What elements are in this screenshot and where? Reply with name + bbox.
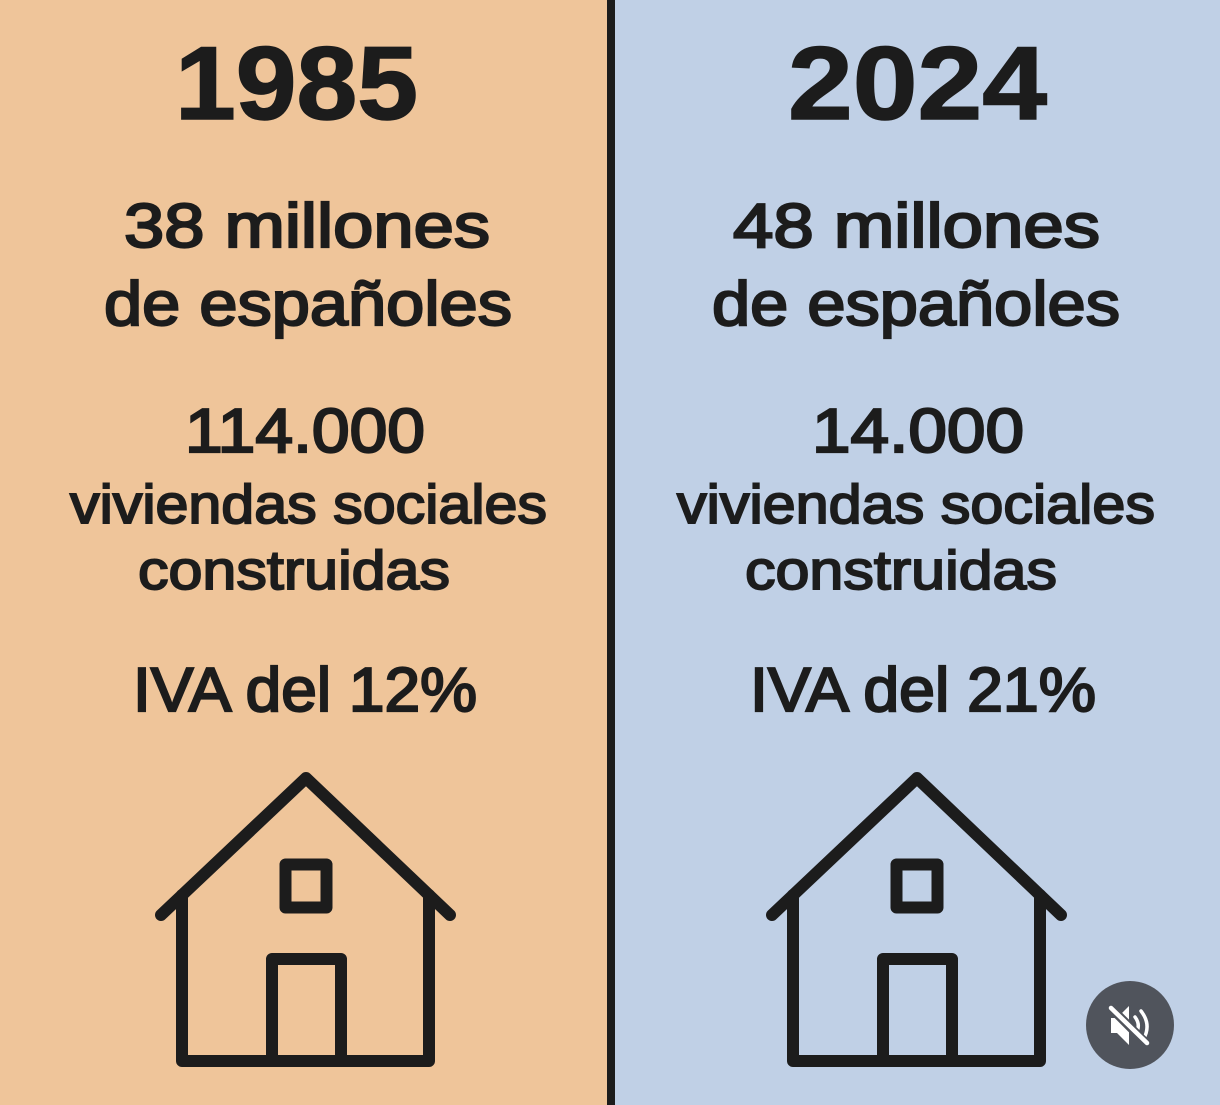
social housing 1985: viviendas sociales [70,473,547,535]
population 2024: 48 millones [733,192,1100,261]
social housing 2024: construidas [745,539,1057,601]
population 1985: de españoles [104,270,512,339]
social housing 1985: 114.000 [185,397,425,466]
VAT 2024: IVA del 21% [750,656,1096,725]
population 2024: de españoles [712,270,1120,339]
population 1985 [104,192,512,339]
social housing 2024: viviendas sociales [677,473,1155,535]
divider [607,0,615,1105]
social housing 1985 [70,397,547,601]
panel: 1985 [0,0,607,1105]
icon: house 1985 [161,778,450,1061]
icon: house 2024 [772,778,1061,1061]
year 2024: 2024 [788,26,1047,142]
VAT 1985: IVA del 12% [133,656,477,725]
panel: 2024 [615,0,1220,1105]
year 1985: 1985 [175,26,418,142]
social housing 2024: 14.000 [812,397,1024,466]
population 1985: 38 millones [124,192,490,261]
social housing 1985: construidas [138,539,450,601]
social housing 2024 [677,397,1155,601]
population 2024 [712,192,1120,339]
icon: muted speaker button [1086,981,1174,1069]
